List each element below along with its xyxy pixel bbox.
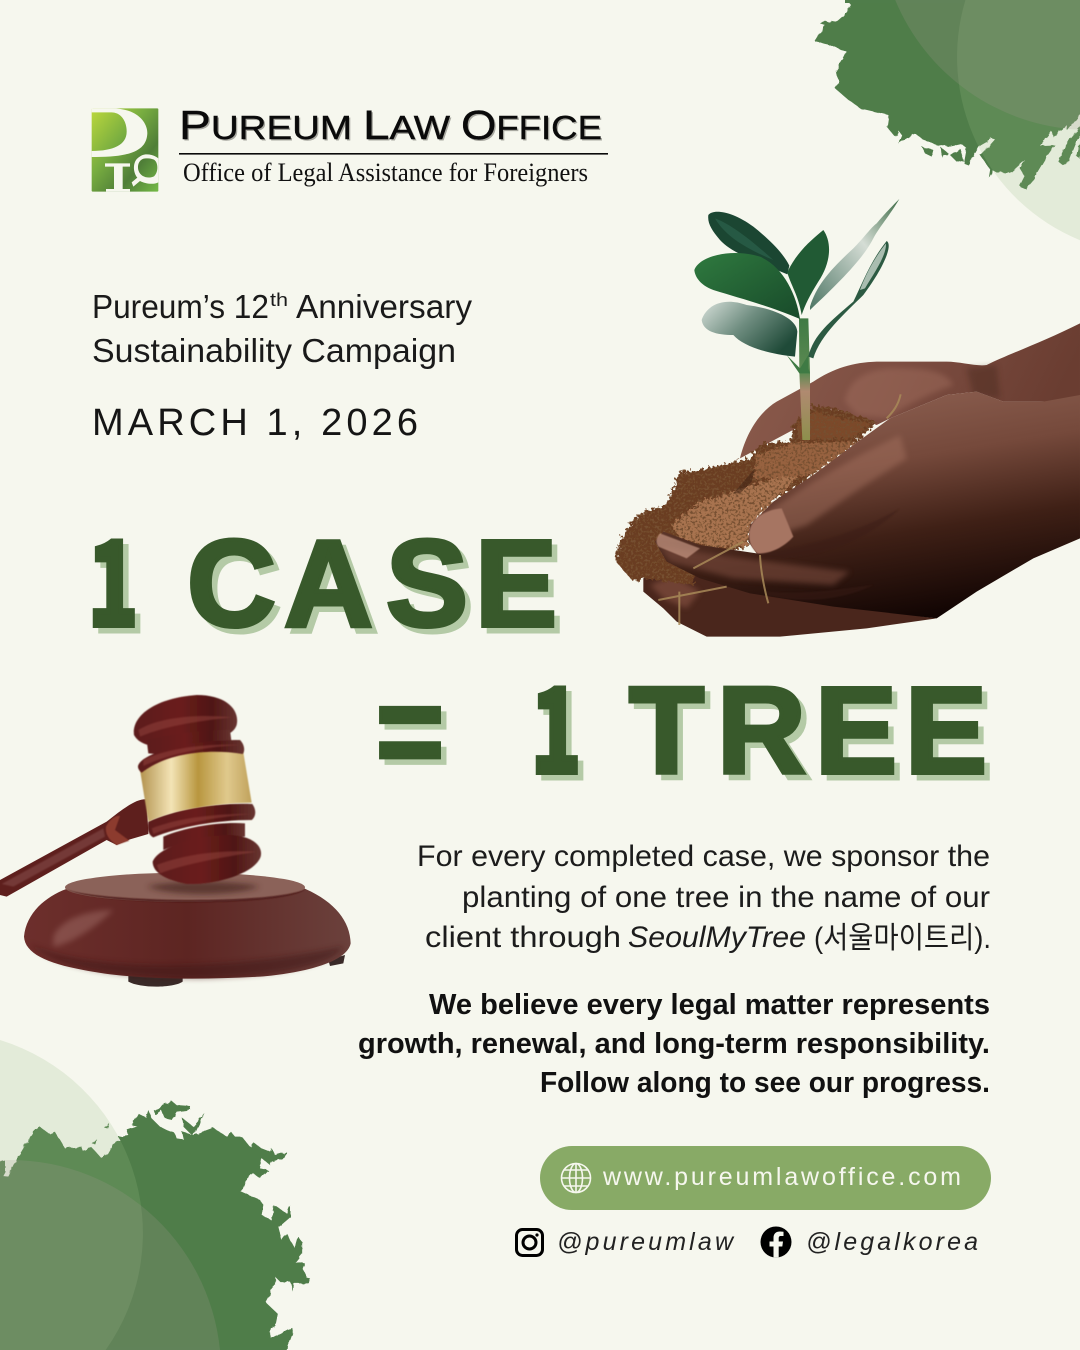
paragraph: sponsorship description: client through <box>425 921 621 954</box>
logo wordmark: OFFICE <box>462 104 604 150</box>
instagram handle: @pureumlaw <box>557 1228 735 1256</box>
facebook handle: @legalkorea <box>806 1228 978 1256</box>
logo: LAW <box>363 102 451 148</box>
logo: PUREUM <box>179 102 352 148</box>
campaign heading: Pureum’s 12 <box>92 288 269 325</box>
block <box>24 887 351 979</box>
lower fingers <box>643 562 937 637</box>
dry straw <box>658 394 901 625</box>
headline: = 1 TREE: TREE <box>629 663 987 800</box>
headline: = 1 TREE: = <box>382 662 450 810</box>
paragraph: sponsorship description: SeoulMyTree <box>628 921 806 954</box>
headline: = 1 TREE <box>376 638 993 812</box>
headline: 1 CASE: 1 <box>94 496 144 664</box>
leaves <box>708 212 789 274</box>
headline: 1 CASE: CASE <box>192 522 563 658</box>
icon: instagram <box>516 1230 542 1256</box>
logo: OFFICE <box>461 102 602 148</box>
logo <box>92 102 608 192</box>
gavel head lower part <box>148 804 261 884</box>
logo wordmark: PUREUM <box>180 104 354 150</box>
decoration: top-right paint splash with circles <box>815 0 1080 240</box>
gavel head upper part <box>134 695 244 773</box>
decoration: bottom-left paint splash with circles <box>0 1040 312 1350</box>
photo: hands holding seedling in soil <box>616 199 1080 637</box>
logo wordmark: LAW <box>364 104 452 150</box>
paragraph: sponsorship description <box>417 840 991 955</box>
block top disc <box>65 873 305 902</box>
headline: = 1 TREE: 1 <box>531 638 581 806</box>
paragraph: mission statement: Follow along to see our progress. <box>540 1067 990 1099</box>
campaign heading: Anniversary <box>296 288 473 325</box>
seedling stem <box>799 318 810 440</box>
paragraph: mission statement: We believe every legal matter represents <box>429 989 990 1021</box>
logo mark <box>92 108 158 192</box>
icon: facebook <box>760 1226 792 1258</box>
campaign heading: th <box>270 290 288 310</box>
paragraph: mission statement <box>358 989 990 1099</box>
campaign heading <box>92 288 473 369</box>
headline: 1 CASE: CASE <box>187 516 557 653</box>
headline: 1 CASE: 1 <box>88 491 138 659</box>
feet <box>128 955 345 987</box>
campaign heading: Sustainability Campaign <box>92 332 456 369</box>
photo: gavel on sound block <box>0 695 351 987</box>
front hand <box>655 392 1080 618</box>
soil <box>616 405 877 585</box>
brass band <box>140 748 252 822</box>
paragraph: sponsorship description: planting of one tree in the name of our <box>462 881 990 914</box>
headline: = 1 TREE: TREE <box>634 668 993 806</box>
date: MARCH 1, 2026 <box>92 402 418 444</box>
paragraph: sponsorship description: For every completed case, we sponsor the <box>417 840 990 873</box>
website pill <box>540 1146 991 1210</box>
paragraph: mission statement: growth, renewal, and long-term responsibility. <box>358 1028 990 1060</box>
headline: = 1 TREE: 1 <box>536 644 586 812</box>
palm shading <box>845 368 953 418</box>
back hand <box>740 323 1080 458</box>
paragraph: sponsorship description: (서울마이트리). <box>814 922 991 955</box>
website url: www.pureumlawoffice.com <box>602 1163 961 1191</box>
logo tagline: Office of Legal Assistance for Foreigners <box>183 158 588 187</box>
logo wordmark <box>180 104 604 150</box>
icon: globe <box>562 1164 590 1192</box>
handle <box>0 799 148 897</box>
headline: = 1 TREE: = <box>376 657 444 804</box>
headline: 1 CASE <box>88 491 563 664</box>
thumb highlight and nail <box>757 435 907 542</box>
